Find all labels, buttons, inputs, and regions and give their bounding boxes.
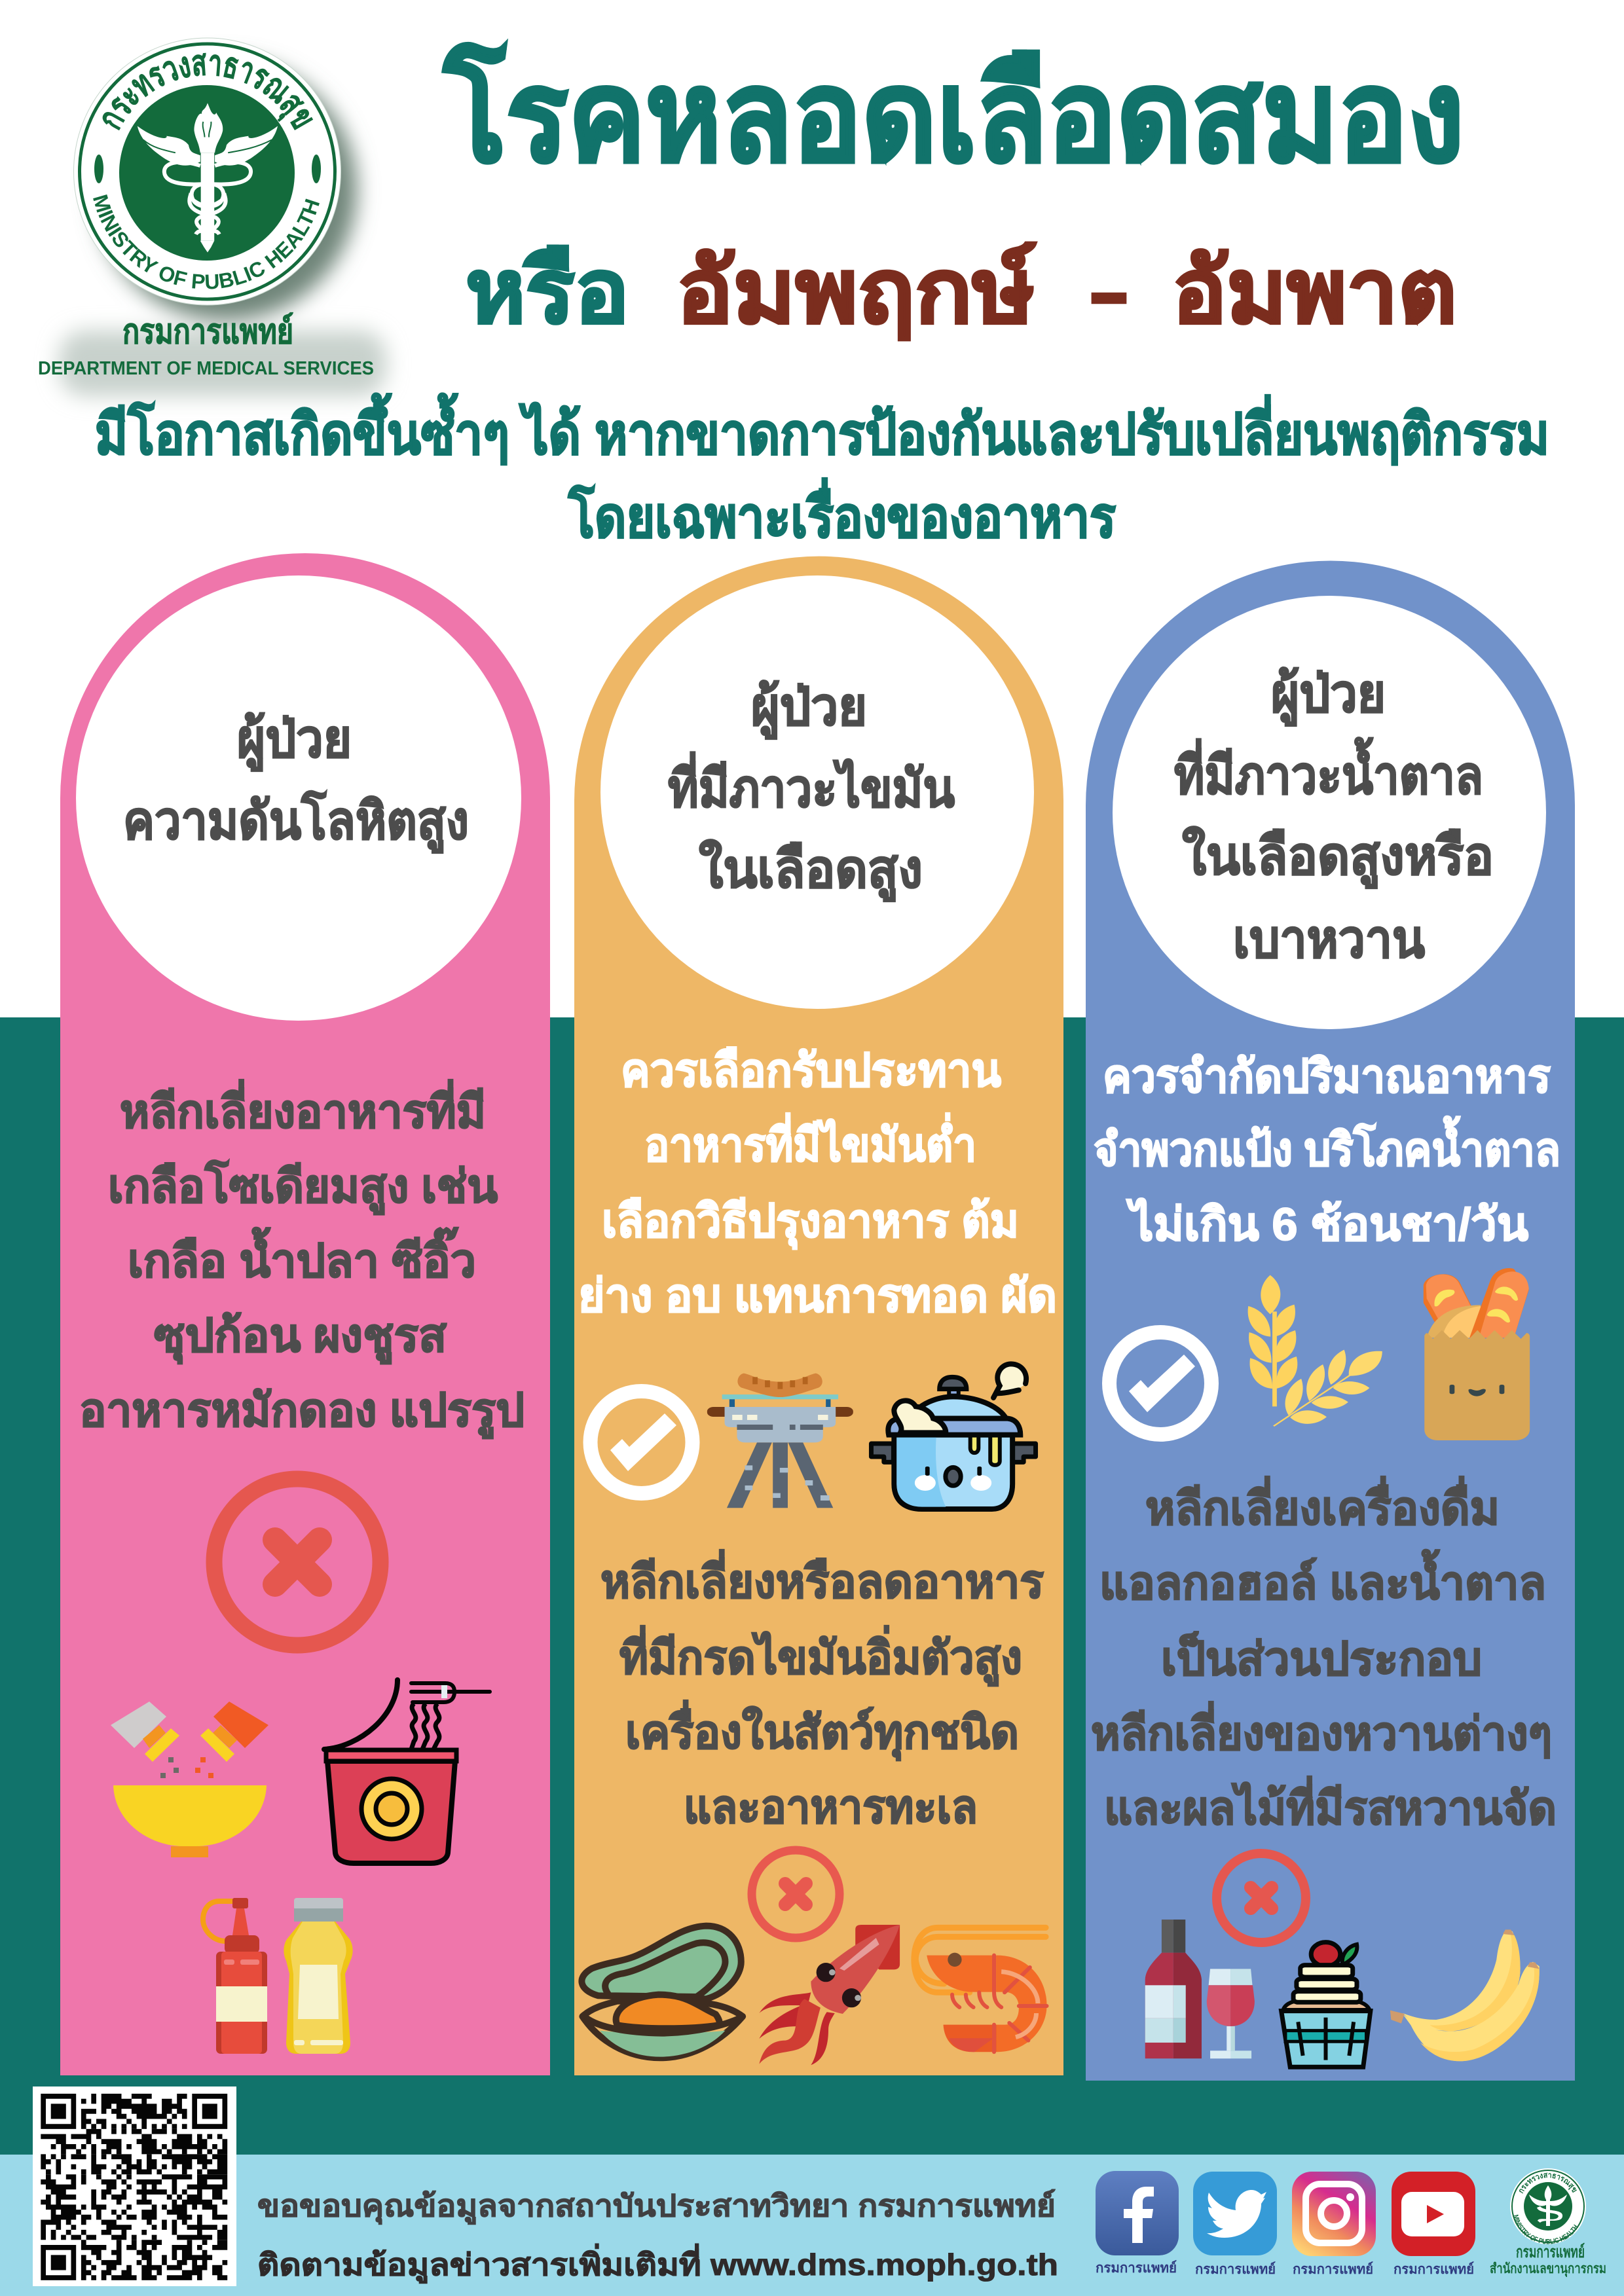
advice line 3: เกลือ น้ำปลา ซีอิ๊ว [128,1227,476,1286]
choose line 3: เลือกวิธีปรุงอาหาร ต้ม [602,1195,1019,1250]
advice line 2: เกลือโซเดียมสูง เช่น [108,1159,498,1215]
seal side ornaments [94,155,321,183]
choose line 4: ย่าง อบ แทนการทอด ผัด [578,1270,1057,1321]
small seal text: English: MINISTRY OF PUBLIC HEALTH [1514,2214,1578,2244]
heading line 4: เบาหวาน [1233,910,1425,968]
icon: check mark [1109,1332,1211,1434]
choose advice [578,1045,1057,1321]
icon: youtube [1392,2172,1475,2256]
small logo department name: กรมการแพทย์ [1516,2242,1585,2261]
panel heading [668,678,955,902]
panel: high blood sugar [1086,560,1575,2081]
avoid advice [1091,1476,1557,1834]
heading line 1: ผู้ป่วย [751,678,867,740]
blue arch panel [1086,560,1575,2081]
icon: banana [1390,1929,1540,2061]
choose line 1: ควรเลือกรับประทาน [621,1045,1001,1096]
subtitle [466,242,1457,341]
icon: avoid cross [214,1479,380,1645]
icon: mussel [581,1926,743,2058]
heading line 2: ที่มีภาวะน้ำตาล [1174,737,1483,805]
icon: squid [759,1925,900,2065]
icon: shrimp [914,1927,1047,2052]
icon: bread bag [1424,1268,1530,1440]
QR modules [41,2096,227,2278]
seal disc [73,38,341,305]
advice line 5: อาหารหมักดอง แปรรูป [79,1385,525,1439]
icon: instagram [1292,2172,1376,2256]
icon: facebook [1096,2171,1179,2255]
heading line 1: ผู้ป่วย [1271,665,1386,727]
footer band [0,2155,1624,2296]
limit line 3: ไม่เกิน 6 ช้อนชา/วัน [1126,1197,1528,1250]
advice line 4: ซุปก้อน ผงชูรส [154,1310,447,1364]
avoid line 3: เครื่องในสัตว์ทุกชนิด [625,1700,1019,1761]
heading line 2: ที่มีภาวะไขมัน [668,752,955,818]
avoid line 4: หลีกเลี่ยงของหวานต่างๆ [1091,1701,1552,1759]
pink arch panel [60,553,550,2075]
icon: twitter [1193,2172,1277,2255]
department name: English: DEPARTMENT OF MEDICAL SERVICES [38,358,374,379]
QR background [33,2086,236,2286]
icon: grill with sausage [707,1374,853,1508]
header circle [76,575,521,1021]
department name: Thai: กรมการแพทย์ [122,312,293,351]
twitter label: กรมการแพทย์ [1195,2261,1276,2277]
intro line 2: โดยเฉพาะเรื่องของอาหาร [568,477,1116,549]
heading line 1: ผู้ป่วย [237,710,352,772]
heading line 3: ในเลือดสูงหรือ [1182,826,1494,889]
icon: avoid cross [1217,1853,1306,1942]
icon: seasoning bowl [111,1702,268,1857]
QR code [33,2086,236,2286]
header circle [600,575,1034,1009]
avoid line 2: ที่มีกรดไขมันอิ่มตัวสูง [619,1625,1022,1686]
teal background band [0,1017,1624,2155]
footer follow line: ติดตามข้อมูลข่าวสารเพิ่มเติมที่ www.dms.moph.go.th [257,2244,1058,2284]
avoid line 1: หลีกเลี่ยงหรือลดอาหาร [600,1549,1044,1607]
avoid line 2: แอลกอฮอล์ และน้ำตาล [1099,1549,1546,1609]
subtitle: dash: – [1090,242,1128,341]
icon: check mark [591,1391,693,1493]
advice text [79,1079,525,1439]
small seal caduceus [1529,2185,1567,2226]
panel heading [1174,665,1494,968]
icon: sauce bottles [203,1898,353,2054]
small seal disc [1510,2168,1586,2244]
avoid line 4: และอาหารทะเล [684,1781,978,1832]
logo shadow [59,59,386,396]
limit advice [1094,1051,1560,1250]
orange arch panel [574,556,1063,2075]
avoid line 5: และผลไม้ที่มีรสหวานจัด [1104,1776,1557,1834]
limit line 1: ควรจำกัดปริมาณอาหาร [1103,1051,1551,1102]
heading line 2: ความดันโลหิตสูง [123,790,469,854]
panel: high blood fat [574,556,1063,2075]
icon: instant noodles [324,1680,490,1863]
logo: ministry of public health seal [38,38,397,407]
avoid line 3: เป็นส่วนประกอบ [1161,1631,1482,1685]
intro text [95,393,1549,549]
small ministry logo [1490,2168,1606,2278]
heading line 3: ในเลือดสูง [699,839,923,902]
footer credit line: ขอขอบคุณข้อมูลจากสถาบันประสาทวิทยา กรมการแพทย์ [257,2189,1056,2225]
small seal text: Thai: กระทรวงสาธารณสุข [1519,2172,1577,2193]
limit line 2: จำพวกแป้ง บริโภคน้ำตาล [1094,1116,1560,1175]
advice line 1: หลีกเลี่ยงอาหารที่มี [120,1079,486,1137]
avoid line 1: หลีกเลี่ยงเครื่องดื่ม [1145,1476,1500,1534]
instagram label: กรมการแพทย์ [1293,2261,1373,2277]
subtitle: or: หรือ [466,242,629,341]
header circle [1113,596,1546,1029]
subtitle: stroke term 1: อัมพฤกษ์ [676,242,1036,341]
icon: boiling pot [871,1364,1036,1509]
title: โรคหลอดเลือดสมอง [443,43,1464,188]
seal caduceus [138,103,278,253]
choose line 2: อาหารที่มีไขมันต่ำ [644,1112,976,1171]
icon: wheat [1248,1275,1382,1426]
facebook label: กรมการแพทย์ [1096,2260,1177,2276]
icon: cupcake [1282,1942,1371,2067]
panel heading [123,710,469,854]
icon: wine [1145,1920,1255,2058]
subtitle: stroke term 2: อัมพาต [1172,242,1457,341]
icon: avoid cross [752,1850,840,1938]
panel: high blood pressure [60,553,550,2075]
youtube label: กรมการแพทย์ [1393,2261,1474,2277]
avoid advice [600,1549,1044,1832]
seal text: English: MINISTRY OF PUBLIC HEALTH [93,194,320,289]
seal text: Thai: กระทรวงสาธารณสุข [102,52,313,131]
